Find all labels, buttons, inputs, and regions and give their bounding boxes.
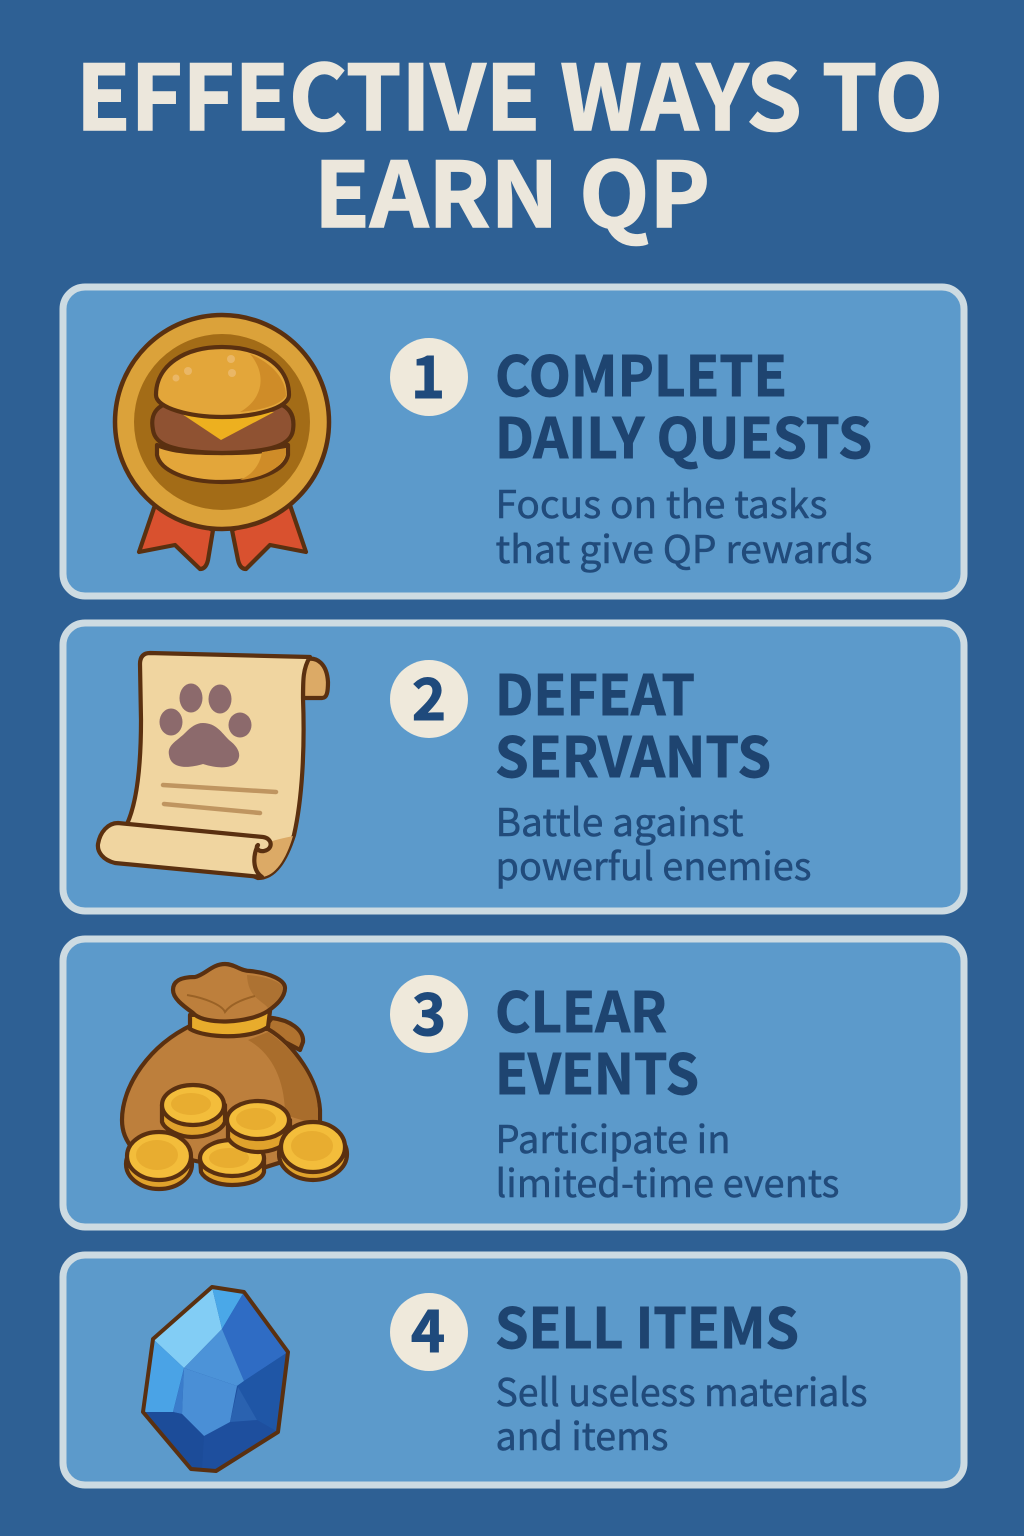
description 1 <box>496 474 872 574</box>
icon: blue gem <box>143 1287 288 1471</box>
heading 3: EVENTS <box>495 1030 699 1110</box>
heading 3 <box>495 968 699 1110</box>
panel: complete daily quests <box>63 287 964 596</box>
panel: clear events <box>63 939 964 1227</box>
description 2: powerful enemies <box>496 836 812 891</box>
description 1: that give QP rewards <box>496 519 872 574</box>
description 4: and items <box>496 1406 668 1461</box>
description 2: Battle against <box>496 792 744 847</box>
number badge 2: 2 <box>412 653 446 737</box>
number badge 4 <box>390 1285 468 1371</box>
title <box>76 26 943 253</box>
number badge 3 <box>390 968 468 1053</box>
heading 2 <box>495 651 771 793</box>
description 4 <box>496 1362 868 1461</box>
number badge 3: 3 <box>412 968 446 1052</box>
icon: paw scroll <box>98 653 328 878</box>
number badge 2 <box>390 653 468 738</box>
description 3: limited-time events <box>496 1153 840 1208</box>
heading 1 <box>495 332 872 474</box>
description 2 <box>496 792 812 891</box>
description 3: Participate in <box>496 1109 730 1164</box>
title: EFFECTIVE WAYS TO <box>76 26 943 156</box>
heading 1: DAILY QUESTS <box>495 394 872 474</box>
heading 2: SERVANTS <box>495 713 771 793</box>
description 1: Focus on the tasks <box>496 474 828 529</box>
panel: sell items <box>63 1255 964 1485</box>
number badge 4: 4 <box>411 1285 445 1369</box>
icon: coin bag <box>122 964 347 1189</box>
panel: defeat servants <box>63 623 964 911</box>
number badge 1: 1 <box>411 331 445 415</box>
heading 2: DEFEAT <box>495 651 695 731</box>
title: EARN QP <box>314 123 710 253</box>
heading 3: CLEAR <box>495 968 667 1048</box>
description 3 <box>496 1109 840 1208</box>
number badge 1 <box>390 331 468 416</box>
heading 1: COMPLETE <box>495 332 787 412</box>
icon: burger medal <box>115 315 329 569</box>
heading 4: SELL ITEMS <box>495 1284 799 1364</box>
description 4: Sell useless materials <box>496 1362 868 1417</box>
